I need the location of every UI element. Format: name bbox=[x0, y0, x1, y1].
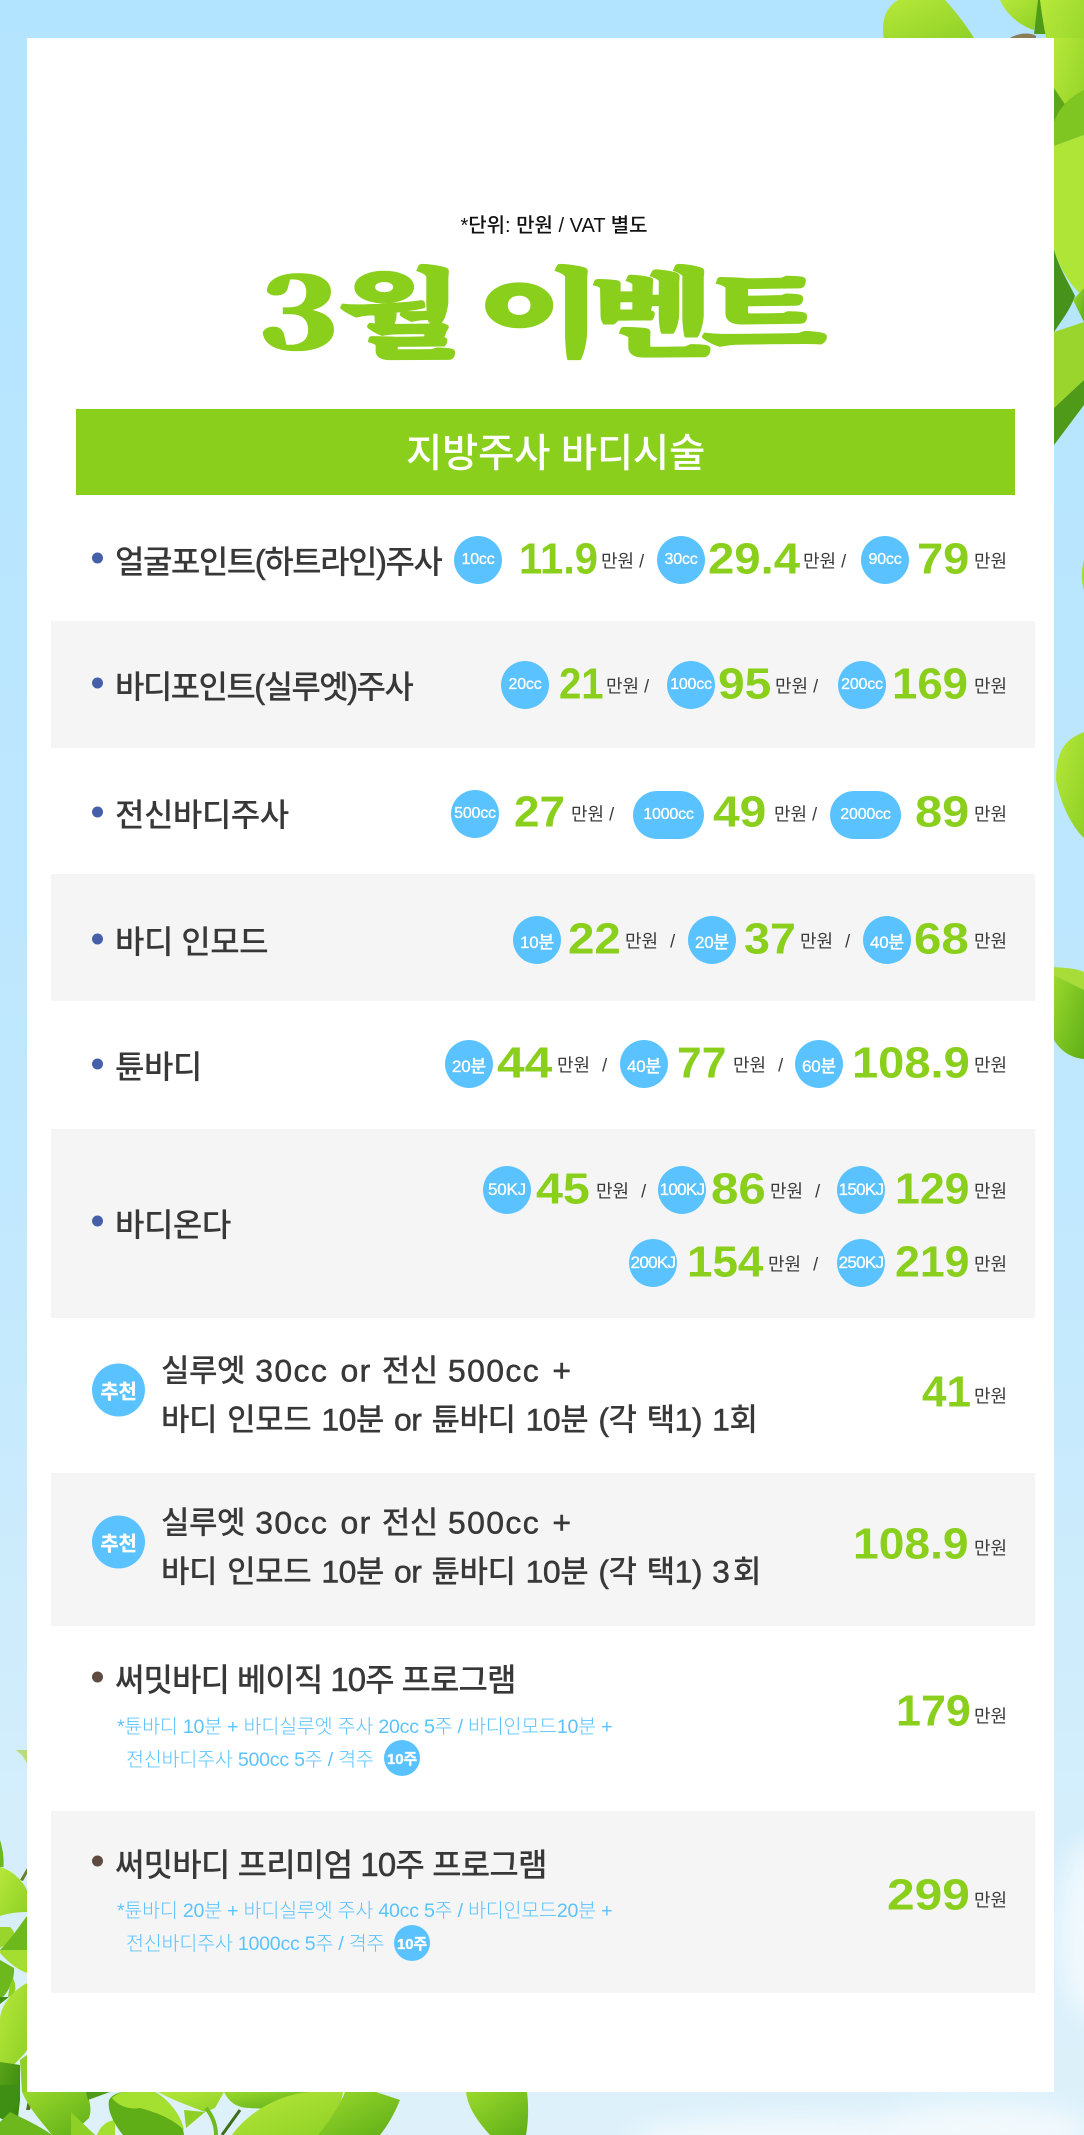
label: 튠바디 bbox=[115, 1049, 202, 1085]
unit: 만원 / bbox=[770, 1181, 820, 1201]
description line 1: *튠바디 20분 + 바디실루엣 주사 40cc 5주 / 바디인모드20분 + bbox=[117, 1900, 612, 1922]
label: 바디포인트(실루엣)주사 bbox=[115, 668, 412, 705]
badge 200cc: 200cc bbox=[841, 676, 883, 693]
unit: 만원 bbox=[974, 1254, 1007, 1274]
price 169: 169 bbox=[892, 660, 968, 709]
unit: 만원 / bbox=[800, 931, 850, 951]
badge 50KJ: 50KJ bbox=[488, 1180, 526, 1199]
unit: 만원 / bbox=[596, 1181, 646, 1201]
bullet bbox=[92, 1216, 103, 1226]
row: 얼굴포인트 bbox=[92, 535, 1007, 584]
badge 10주: 10주 bbox=[387, 1750, 417, 1768]
price 95: 95 bbox=[718, 660, 771, 709]
unit: 만원 bbox=[974, 1890, 1007, 1910]
price 41: 41 bbox=[922, 1368, 971, 1417]
description line 1: *튠바디 10분 + 바디실루엣 주사 20cc 5주 / 바디인모드10분 + bbox=[117, 1716, 612, 1738]
badge 200KJ: 200KJ bbox=[631, 1253, 675, 1272]
unit: 만원 / bbox=[774, 804, 817, 824]
badge 500cc bbox=[451, 790, 499, 838]
badge 100cc bbox=[667, 661, 715, 709]
price 129: 129 bbox=[895, 1165, 970, 1214]
badge 2000cc: 2000cc bbox=[840, 806, 891, 823]
badge 10주: 10주 bbox=[397, 1936, 427, 1952]
unit: 만원 bbox=[974, 1386, 1007, 1406]
label: 바디온다 bbox=[115, 1207, 231, 1243]
row: 바디 인모드 bbox=[51, 874, 1035, 1001]
text line 2: 바디 인모드 10분 or 튠바디 10분 (각 택1) 1회 bbox=[161, 1402, 757, 1438]
unit: 만원 bbox=[974, 1181, 1007, 1201]
badge 60분: 60분 bbox=[802, 1056, 836, 1076]
badge 500cc: 500cc bbox=[454, 805, 496, 822]
price 68: 68 bbox=[914, 915, 969, 964]
unit: 만원 bbox=[974, 1706, 1007, 1726]
unit: 만원 / bbox=[775, 676, 818, 696]
description line 2: 전신바디주사 1000cc 5주 / 격주 bbox=[126, 1933, 384, 1955]
price 86: 86 bbox=[711, 1165, 766, 1214]
badge 40분: 40분 bbox=[870, 932, 904, 952]
badge 30cc bbox=[657, 536, 705, 584]
price 37: 37 bbox=[744, 915, 796, 964]
unit: 만원 bbox=[974, 804, 1007, 824]
text line 1: 실루엣 30cc or 전신 500cc + bbox=[161, 1504, 572, 1540]
price 44: 44 bbox=[497, 1039, 552, 1088]
row: 추천 3회 bbox=[51, 1473, 1035, 1626]
price 29.4: 29.4 bbox=[708, 535, 800, 584]
bullet bbox=[92, 934, 103, 944]
label: 써밋바디 베이직 10주 프로그램 bbox=[115, 1661, 515, 1698]
badge 20분: 20분 bbox=[695, 932, 729, 952]
price 45: 45 bbox=[536, 1165, 590, 1214]
badge 10주 bbox=[394, 1925, 430, 1961]
label: 얼굴포인트(하트라인)주사 bbox=[115, 543, 441, 580]
unit: 만원 / bbox=[625, 931, 675, 951]
unit: 만원 / bbox=[571, 804, 614, 824]
price 77: 77 bbox=[677, 1039, 726, 1088]
badge 추천 bbox=[92, 1364, 145, 1416]
badge 250KJ: 250KJ bbox=[839, 1253, 883, 1272]
unit: 만원 / bbox=[557, 1055, 607, 1075]
badge 1000cc: 1000cc bbox=[643, 806, 694, 823]
badge 20분 bbox=[688, 916, 736, 964]
badge 90cc: 90cc bbox=[868, 551, 902, 568]
badge 150KJ: 150KJ bbox=[839, 1180, 883, 1199]
badge 추천 bbox=[92, 1516, 145, 1568]
unit: 만원 bbox=[974, 551, 1007, 571]
badge 40분 bbox=[620, 1040, 668, 1088]
row: 프리미엄 프로그램 bbox=[51, 1811, 1035, 1993]
text line 2: 바디 인모드 10분 or 튠바디 10분 (각 택1) 3회 bbox=[161, 1554, 761, 1590]
unit note: *단위: 만원 / VAT 별도 bbox=[460, 215, 648, 237]
row: 튠바디 bbox=[92, 1039, 1007, 1088]
badge 100KJ bbox=[658, 1166, 706, 1214]
badge 10분: 10분 bbox=[520, 932, 554, 952]
price 11.9: 11.9 bbox=[519, 535, 598, 584]
badge 40분: 40분 bbox=[627, 1056, 661, 1076]
bullet bbox=[92, 1058, 103, 1070]
right edge leaves bbox=[1082, 560, 1084, 590]
badge 20분: 20분 bbox=[452, 1056, 486, 1076]
unit: 만원 bbox=[974, 676, 1007, 696]
left edge leaves bbox=[15, 1750, 27, 1764]
price 108.9: 108.9 bbox=[852, 1039, 970, 1088]
bullet bbox=[92, 552, 103, 564]
row: 전신바디주사 bbox=[92, 788, 1007, 839]
price 179: 179 bbox=[896, 1687, 971, 1736]
badge 2000cc bbox=[830, 791, 901, 839]
badge 50KJ bbox=[483, 1166, 531, 1214]
price 299: 299 bbox=[887, 1871, 970, 1920]
section heading: 지방주사 바디시술 bbox=[76, 409, 1015, 495]
price 27: 27 bbox=[514, 788, 565, 837]
unit: 만원 / bbox=[606, 676, 649, 696]
row: 추천 1회 bbox=[92, 1352, 1007, 1438]
badge 20분 bbox=[445, 1040, 493, 1088]
price 154: 154 bbox=[687, 1238, 763, 1287]
row: 바디온다 bbox=[51, 1129, 1035, 1318]
price 219: 219 bbox=[895, 1238, 970, 1287]
price 22: 22 bbox=[568, 915, 621, 964]
bottom leaves bbox=[0, 2085, 20, 2120]
section heading: 지방주사 바디시술: 지방주사 바디시술 bbox=[406, 432, 705, 476]
badge 40분 bbox=[863, 916, 911, 964]
unit: 만원 / bbox=[601, 551, 644, 571]
text line 1: 실루엣 30cc or 전신 500cc + bbox=[161, 1352, 572, 1388]
label: 써밋바디 프리미엄 10주 프로그램 bbox=[115, 1846, 547, 1883]
badge 20cc: 20cc bbox=[508, 676, 542, 693]
top right leaves bbox=[883, 0, 975, 40]
price 79: 79 bbox=[917, 535, 969, 584]
bullet bbox=[92, 1672, 103, 1682]
unit: 만원 bbox=[974, 1055, 1007, 1075]
unit: 만원 / bbox=[803, 551, 846, 571]
badge 150KJ bbox=[837, 1166, 885, 1214]
row: 베이직 프로그램 bbox=[92, 1661, 1007, 1776]
badge 200cc bbox=[838, 661, 886, 709]
unit: 만원 bbox=[974, 1538, 1007, 1558]
badge 추천: 추천 bbox=[100, 1382, 137, 1404]
badge 1000cc bbox=[633, 791, 704, 839]
badge 추천: 추천 bbox=[100, 1534, 137, 1556]
bullet bbox=[92, 1856, 103, 1866]
price 49: 49 bbox=[713, 788, 766, 837]
unit: 만원 bbox=[974, 931, 1007, 951]
badge 60분 bbox=[795, 1040, 843, 1088]
price 108.9: 108.9 bbox=[853, 1520, 969, 1569]
badge 20cc bbox=[501, 661, 549, 709]
badge 10분 bbox=[513, 916, 561, 964]
badge 200KJ bbox=[629, 1239, 677, 1287]
bullet bbox=[92, 678, 103, 688]
badge 100KJ: 100KJ bbox=[660, 1180, 704, 1199]
price 89: 89 bbox=[915, 788, 969, 837]
badge 30cc: 30cc bbox=[664, 551, 698, 568]
price 21: 21 bbox=[559, 660, 604, 709]
badge 90cc bbox=[861, 536, 909, 584]
description line 2: 전신바디주사 500cc 5주 / 격주 bbox=[126, 1749, 374, 1771]
badge 10주 bbox=[384, 1740, 420, 1776]
badge 10cc bbox=[454, 536, 502, 584]
unit: 만원 / bbox=[768, 1254, 818, 1274]
badge 250KJ bbox=[837, 1239, 885, 1287]
badge 100cc: 100cc bbox=[670, 676, 712, 693]
unit: 만원 / bbox=[733, 1055, 783, 1075]
badge 10cc: 10cc bbox=[462, 551, 494, 568]
row: 바디포인트 bbox=[51, 621, 1035, 748]
label: 바디 인모드 bbox=[115, 924, 268, 960]
label: 전신바디주사 bbox=[115, 797, 289, 833]
bullet bbox=[92, 806, 103, 818]
clouds bbox=[630, 1840, 1084, 2135]
